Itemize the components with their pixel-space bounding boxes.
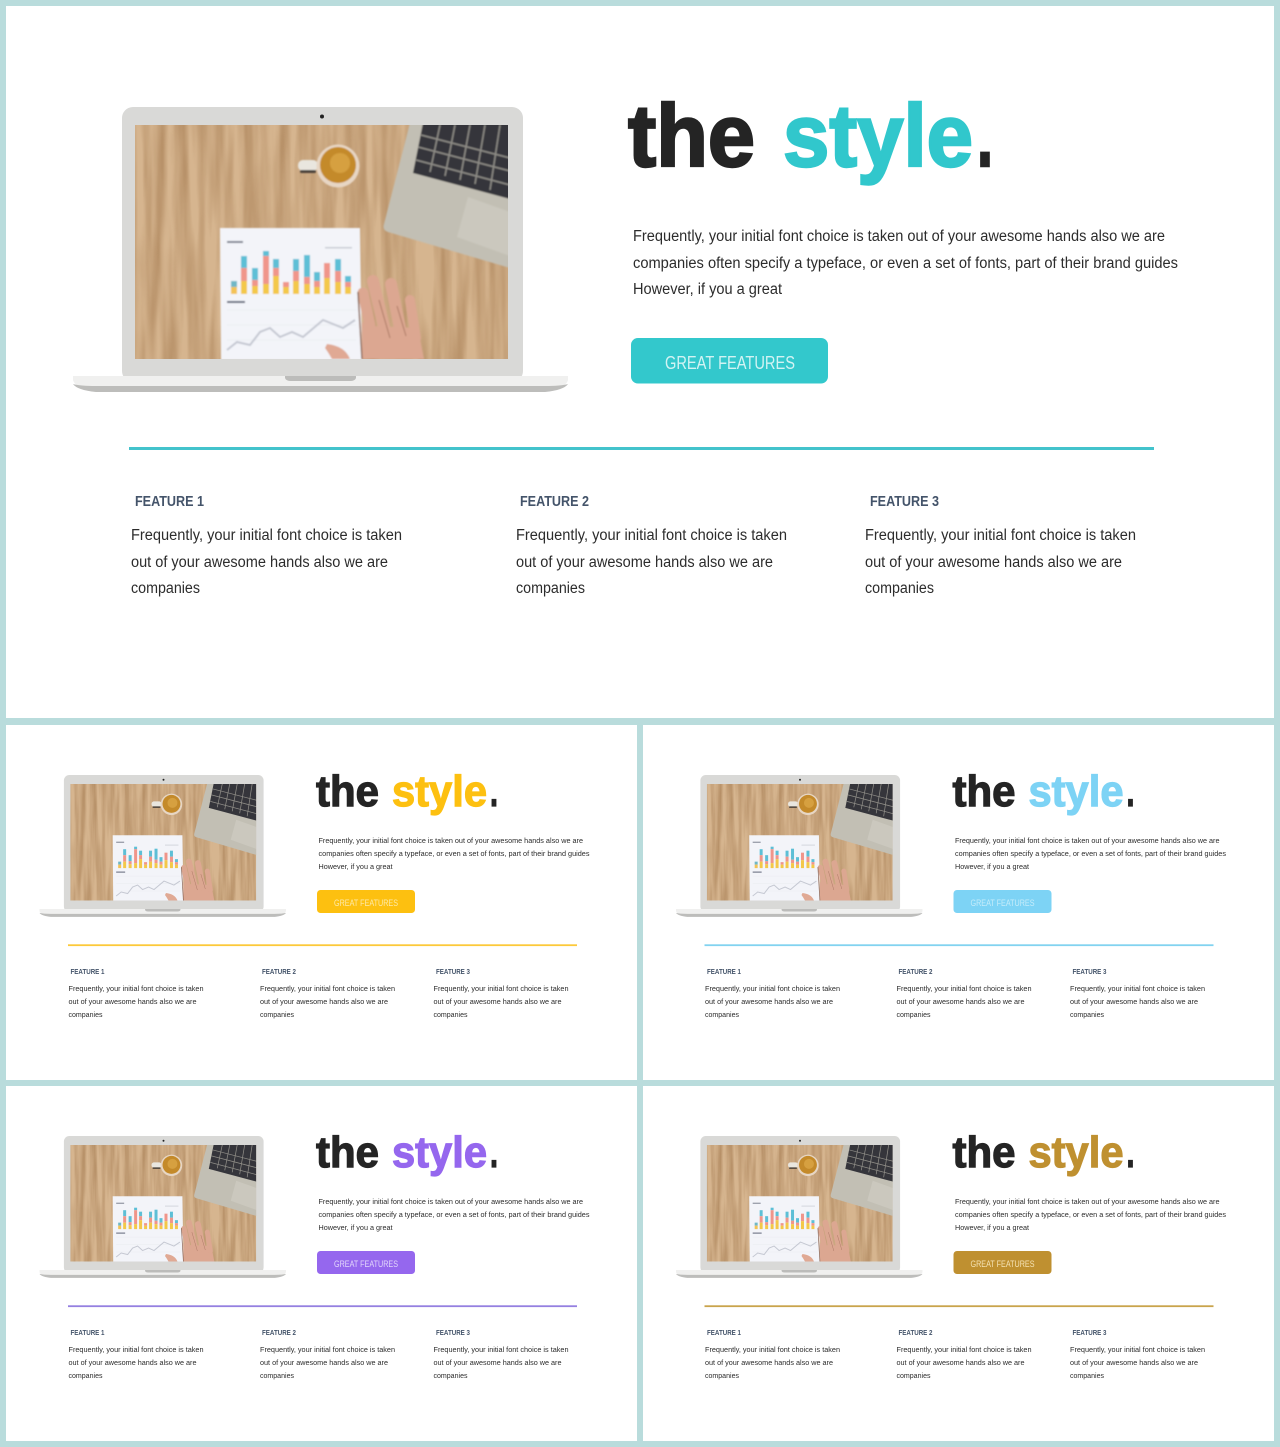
panel: yellow variant: [6, 725, 637, 1080]
intro text: [318, 836, 590, 871]
feature 3: [865, 494, 1136, 597]
button: [317, 1251, 415, 1274]
feature 3: out of your awesome hands also we are: [434, 997, 562, 1006]
feature 3: Frequently, your initial font choice is taken: [865, 527, 1136, 544]
intro text: Frequently, your initial font choice is taken out of your awesome hands also we are: [318, 836, 583, 845]
feature 1: FEATURE 1: [70, 967, 104, 976]
button: GREAT FEATURES: [334, 1259, 398, 1269]
intro text: [633, 228, 1178, 298]
feature 1: Frequently, your initial font choice is taken: [131, 527, 402, 544]
intro text: However, if you a great: [633, 281, 783, 298]
title: [316, 767, 498, 816]
title: the: [316, 767, 379, 816]
feature 1: FEATURE 1: [70, 1328, 104, 1337]
feature 3: Frequently, your initial font choice is taken: [434, 984, 568, 993]
laptop mockup: [676, 1136, 923, 1278]
title: style: [392, 1128, 487, 1177]
intro text: However, if you a great: [955, 862, 1030, 871]
feature 3: companies: [434, 1010, 468, 1019]
title: [316, 1128, 498, 1177]
intro text: companies often specify a typeface, or even a set of fonts, part of their brand guides: [318, 1210, 590, 1219]
intro text: However, if you a great: [318, 1223, 393, 1232]
feature 3: companies: [865, 580, 934, 597]
feature 3: FEATURE 3: [1072, 967, 1106, 976]
laptop mockup with photo: [73, 107, 568, 392]
title: [628, 86, 993, 185]
feature 1: companies: [705, 1010, 739, 1019]
title: style: [392, 767, 487, 816]
feature 1: [68, 1328, 204, 1380]
feature 3: companies: [1070, 1010, 1104, 1019]
intro text: companies often specify a typeface, or even a set of fonts, part of their brand guides: [955, 849, 1226, 858]
feature 1: out of your awesome hands also we are: [68, 997, 196, 1006]
feature 2: Frequently, your initial font choice is taken: [260, 984, 395, 993]
feature 2: companies: [896, 1371, 931, 1380]
feature 3: FEATURE 3: [436, 1328, 470, 1337]
feature 2: Frequently, your initial font choice is taken: [896, 984, 1032, 993]
button: [631, 338, 828, 384]
feature 3: [434, 1328, 568, 1380]
title: .: [490, 1128, 498, 1177]
button: GREAT FEATURES: [334, 898, 398, 908]
feature 1: companies: [68, 1010, 103, 1019]
laptop mockup: [39, 775, 286, 917]
button: GREAT FEATURES: [970, 898, 1034, 908]
title: [952, 1128, 1134, 1177]
feature 2: FEATURE 2: [520, 494, 589, 510]
feature 2: FEATURE 2: [262, 967, 296, 976]
feature 3: companies: [434, 1371, 468, 1380]
feature 3: out of your awesome hands also we are: [434, 1358, 562, 1367]
feature 1: Frequently, your initial font choice is taken: [68, 1345, 204, 1354]
feature 3: [434, 967, 568, 1019]
intro text: However, if you a great: [318, 862, 393, 871]
feature 3: FEATURE 3: [1072, 1328, 1106, 1337]
feature 2: [260, 967, 395, 1019]
intro text: Frequently, your initial font choice is taken out of your awesome hands also we are: [955, 1197, 1220, 1206]
feature 2: out of your awesome hands also we are: [260, 997, 388, 1006]
title: [952, 767, 1134, 816]
feature 1: Frequently, your initial font choice is taken: [705, 1345, 840, 1354]
feature 1: [705, 967, 840, 1019]
feature 1: FEATURE 1: [707, 967, 741, 976]
feature 2: out of your awesome hands also we are: [896, 997, 1024, 1006]
title: the: [628, 86, 755, 185]
feature 2: out of your awesome hands also we are: [516, 554, 773, 571]
feature 3: out of your awesome hands also we are: [1070, 997, 1198, 1006]
title: style: [783, 86, 973, 185]
feature 1: FEATURE 1: [135, 494, 204, 510]
feature 3: [1070, 967, 1205, 1019]
feature 3: [1070, 1328, 1205, 1380]
title: .: [977, 86, 993, 185]
feature 2: out of your awesome hands also we are: [896, 1358, 1024, 1367]
intro text: Frequently, your initial font choice is taken out of your awesome hands also we are: [955, 836, 1220, 845]
title: the: [952, 1128, 1016, 1177]
title: .: [1126, 767, 1134, 816]
feature 2: [260, 1328, 395, 1380]
feature 3: Frequently, your initial font choice is taken: [1070, 1345, 1205, 1354]
feature 3: companies: [1070, 1371, 1104, 1380]
feature 2: companies: [516, 580, 585, 597]
feature 1: FEATURE 1: [707, 1328, 741, 1337]
feature 2: Frequently, your initial font choice is taken: [516, 527, 787, 544]
feature 2: [896, 967, 1032, 1019]
feature 1: out of your awesome hands also we are: [131, 554, 388, 571]
title: .: [1126, 1128, 1134, 1177]
button: GREAT FEATURES: [665, 353, 795, 373]
feature 2: FEATURE 2: [898, 1328, 932, 1337]
intro text: companies often specify a typeface, or even a set of fonts, part of their brand guides: [955, 1210, 1226, 1219]
feature 1: companies: [131, 580, 200, 597]
feature 3: out of your awesome hands also we are: [1070, 1358, 1198, 1367]
intro text: companies often specify a typeface, or even a set of fonts, part of their brand guides: [318, 849, 590, 858]
feature 3: out of your awesome hands also we are: [865, 554, 1122, 571]
feature 1: Frequently, your initial font choice is taken: [68, 984, 204, 993]
feature 1: companies: [705, 1371, 739, 1380]
button: [317, 890, 415, 913]
laptop mockup: [39, 1136, 286, 1278]
panel: purple variant: [6, 1086, 637, 1441]
title: the: [952, 767, 1016, 816]
feature 2: Frequently, your initial font choice is taken: [896, 1345, 1032, 1354]
intro text: [318, 1197, 590, 1232]
feature 2: [896, 1328, 1032, 1380]
title: the: [316, 1128, 379, 1177]
laptop mockup: [676, 775, 923, 917]
intro text: [955, 836, 1226, 871]
title: style: [1028, 1128, 1124, 1177]
feature 3: Frequently, your initial font choice is taken: [434, 1345, 568, 1354]
feature 2: companies: [260, 1010, 294, 1019]
feature 3: FEATURE 3: [436, 967, 470, 976]
feature 2: out of your awesome hands also we are: [260, 1358, 388, 1367]
feature 2: [516, 494, 787, 597]
feature 2: FEATURE 2: [262, 1328, 296, 1337]
button: [954, 1251, 1052, 1274]
feature 1: out of your awesome hands also we are: [705, 1358, 833, 1367]
feature 1: [68, 967, 204, 1019]
feature 2: companies: [896, 1010, 931, 1019]
panel: main slide: [6, 6, 1274, 718]
button: GREAT FEATURES: [970, 1259, 1034, 1269]
feature 1: out of your awesome hands also we are: [705, 997, 833, 1006]
intro text: However, if you a great: [955, 1223, 1030, 1232]
title: style: [1028, 767, 1124, 816]
feature 1: companies: [68, 1371, 103, 1380]
intro text: [955, 1197, 1226, 1232]
feature 2: FEATURE 2: [898, 967, 932, 976]
feature 1: [131, 494, 402, 597]
feature 1: [705, 1328, 840, 1380]
feature 2: companies: [260, 1371, 294, 1380]
panel: light blue variant: [643, 725, 1274, 1080]
title: .: [490, 767, 498, 816]
feature 1: Frequently, your initial font choice is taken: [705, 984, 840, 993]
feature 3: FEATURE 3: [870, 494, 939, 510]
feature 3: Frequently, your initial font choice is taken: [1070, 984, 1205, 993]
panel: gold variant: [643, 1086, 1274, 1441]
feature 1: out of your awesome hands also we are: [68, 1358, 196, 1367]
intro text: Frequently, your initial font choice is taken out of your awesome hands also we are: [318, 1197, 583, 1206]
feature 2: Frequently, your initial font choice is taken: [260, 1345, 395, 1354]
intro text: Frequently, your initial font choice is taken out of your awesome hands also we are: [633, 228, 1165, 245]
button: [954, 890, 1052, 913]
intro text: companies often specify a typeface, or even a set of fonts, part of their brand guides: [633, 255, 1178, 272]
